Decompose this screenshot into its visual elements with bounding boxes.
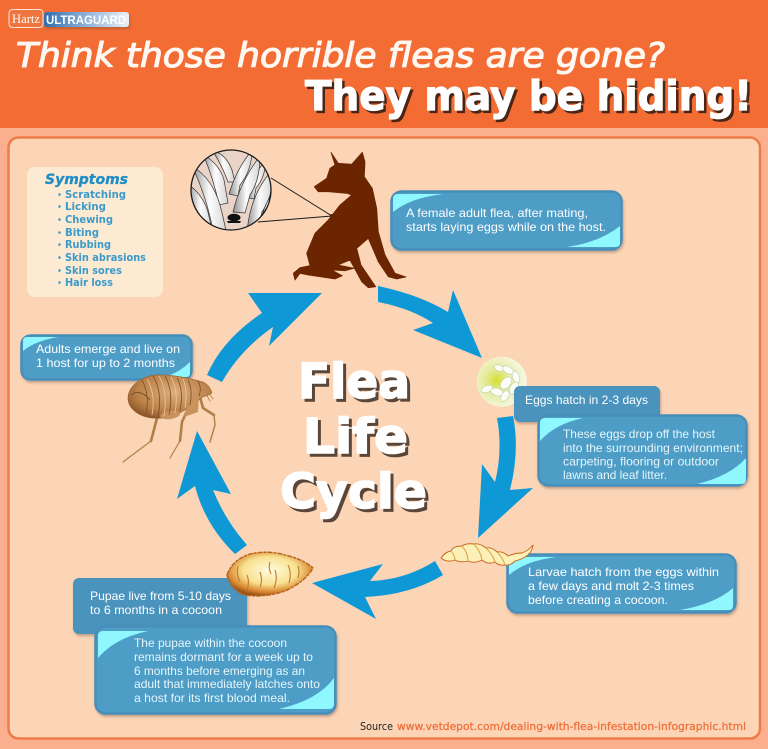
callout: female adult flea: A female adult flea, after mating, [406,206,588,220]
callout: larvae hatch [508,554,736,612]
logo: Hartz UltraGuard [9,10,129,28]
source line: Source [360,721,393,733]
arrow: pupae to adult [177,431,247,554]
icon: larva [441,544,533,565]
callout: eggs drop off host: These eggs drop off the host [563,427,716,441]
icon: flea on skin [227,214,241,223]
main panel [8,138,760,738]
callout: pupae live [73,578,247,634]
icon: dog silhouette [293,152,406,288]
callout: pupae dormant: The pupae within the cocoon [134,636,287,650]
callout: adults emerge: 1 host for up to 2 months [36,356,175,370]
symptoms list [58,189,146,289]
callout: larvae hatch: Larvae hatch from the eggs within [528,565,719,579]
headline: They may be hiding: They may be hiding! [308,74,754,122]
symptoms list: Skin abrasions [65,252,146,264]
callout: pupae live: Pupae live from 5-10 days [90,589,231,603]
callout: adults emerge: Adults emerge and live on [36,342,180,356]
icon: cocoon [227,552,313,596]
icon: adult flea [123,375,215,462]
arrow: larvae to pupae [312,561,443,619]
symptoms list: Licking [65,201,106,213]
callout: pupae dormant: adult that immediately latches onto [134,677,320,691]
symptoms list: Chewing [65,214,113,226]
callout: female adult flea [392,192,622,250]
callout: eggs drop off host: carpeting, flooring or outdoor [563,454,719,468]
callout: pupae live: to 6 months in a cocoon [90,603,222,617]
headline: question: Think those horrible fleas are gone? [16,36,665,75]
callout: larvae hatch: a few days and molt 2-3 times [528,579,694,593]
symptoms heading: Symptoms [45,172,128,188]
panel: symptoms [27,167,163,297]
callout: eggs drop off host: lawns and leaf litter. [563,468,667,482]
callout: larvae hatch: before creating a cocoon. [528,593,668,607]
callout: pupae dormant [96,626,336,714]
logo: Hartz UltraGuard: Hartz [12,12,40,26]
symptoms list: Scratching [65,189,126,201]
header band [0,0,768,128]
center title: Flea Life Cycle [280,354,430,523]
arrow: eggs to larvae [478,416,533,538]
symptoms list: Hair loss [65,277,113,289]
icon: magnified flea in fur [188,150,334,236]
callout: pupae dormant: remains dormant for a week up to [134,650,313,664]
callout: pupae dormant: a host for its first blood meal. [134,691,290,705]
center title: Flea Life Cycle: Flea [301,357,413,413]
symptoms list: Rubbing [65,239,111,251]
arrow: dog to eggs [378,286,482,358]
callout: female adult flea: starts laying eggs while on the host. [406,220,606,234]
center title: Flea Life Cycle: Cycle [280,464,427,520]
callout: pupae dormant: 6 months before emerging as an [134,664,305,678]
callout: eggs drop off host [538,416,746,486]
symptoms list: Skin sores [65,265,122,277]
center title: Flea Life Cycle: Life [306,412,411,468]
headline: They may be hiding: They may be hiding! [305,72,752,120]
symptoms list: Biting [65,227,99,239]
callout: eggs hatch [514,386,660,422]
center title: Flea Life Cycle: Flea [298,354,410,410]
logo: Hartz UltraGuard: ULTRAGUARD [46,15,126,27]
icon: flea eggs [477,357,527,407]
center title: Flea Life Cycle: Life [303,409,408,465]
arrow: adult to dog [207,293,322,382]
source line: www.vetdepot.com/dealing-with-flea-infestation-infographic.html [397,721,746,733]
callout: adults emerge [22,336,192,380]
callout: eggs drop off host: into the surrounding environment; [563,441,743,455]
callout: eggs hatch: Eggs hatch in 2-3 days [525,393,648,407]
center title: Flea Life Cycle: Cycle [283,467,430,523]
